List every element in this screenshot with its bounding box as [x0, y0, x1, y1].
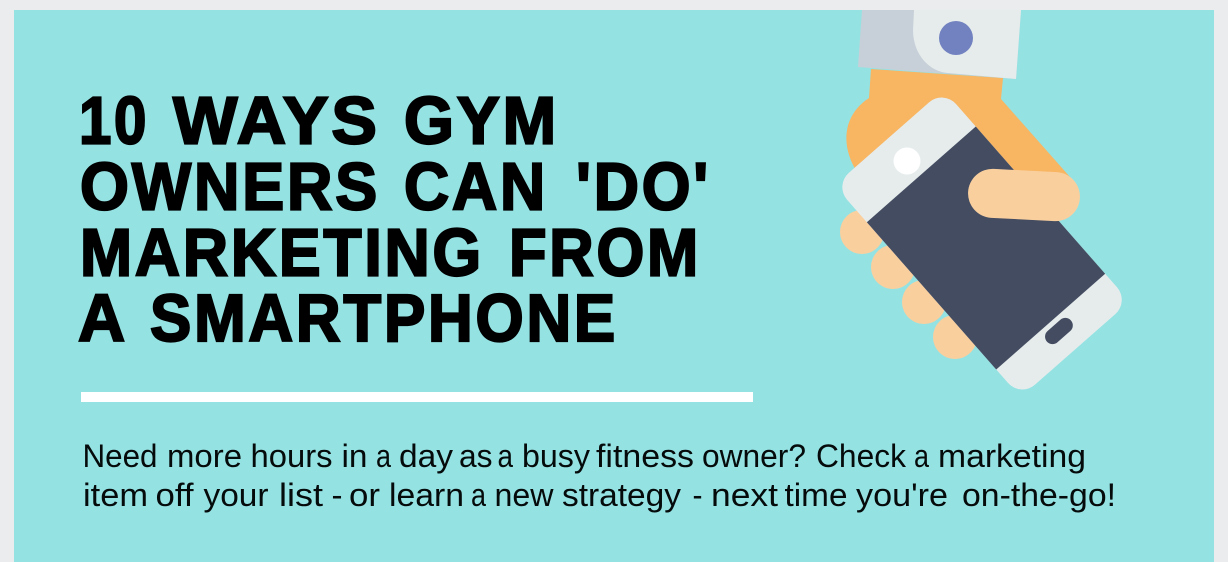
subtitle text: Need [82, 438, 158, 474]
subtitle text: off [156, 477, 194, 513]
subtitle text: fitness [596, 438, 694, 474]
subtitle text: list [279, 477, 323, 513]
phone camera [894, 148, 920, 174]
subtitle text: Check [816, 438, 907, 474]
shirt cuff [858, 10, 1021, 79]
subtitle text: day [399, 438, 453, 474]
title: MARKETING [80, 216, 484, 290]
fingers [840, 210, 977, 359]
subtitle text: or [349, 477, 380, 513]
subtitle text: a [914, 438, 929, 474]
title: CAN [404, 150, 548, 224]
subtitle text: you're [856, 477, 948, 513]
subtitle text: a [498, 438, 513, 474]
subtitle text: - [332, 477, 342, 513]
subtitle text: owner? [702, 438, 806, 474]
title: A [78, 281, 128, 356]
subtitle text: on-the-go! [962, 477, 1116, 513]
icon: hand holding smartphone [835, 10, 1130, 397]
subtitle text [82, 438, 1116, 513]
title: 'DO' [576, 150, 711, 224]
smartphone [835, 90, 1130, 397]
title: GYM [404, 84, 559, 158]
thumb [967, 168, 1081, 222]
title: SMARTPHONE [150, 281, 618, 356]
subtitle text: time [784, 477, 848, 513]
subtitle text: more [167, 438, 242, 474]
title: WAYS [173, 84, 380, 158]
divider bar [81, 392, 753, 402]
title: FROM [509, 216, 701, 290]
title: OWNERS [80, 150, 380, 224]
subtitle text: item [83, 477, 148, 513]
arm and palm [846, 69, 1070, 230]
subtitle text: learn [389, 477, 464, 513]
subtitle text: a [376, 438, 391, 474]
subtitle text: new [494, 477, 554, 513]
title [78, 84, 711, 356]
subtitle text: busy [522, 438, 590, 474]
subtitle text: in [342, 438, 368, 474]
subtitle text: a [471, 477, 486, 513]
subtitle text: - [692, 477, 702, 513]
subtitle text: hours [250, 438, 332, 474]
subtitle text: as [459, 438, 492, 474]
subtitle text: your [204, 477, 269, 513]
subtitle text: next [711, 477, 778, 513]
subtitle text: marketing [938, 438, 1086, 474]
title: 10 [79, 84, 149, 158]
subtitle text: strategy [562, 477, 681, 513]
